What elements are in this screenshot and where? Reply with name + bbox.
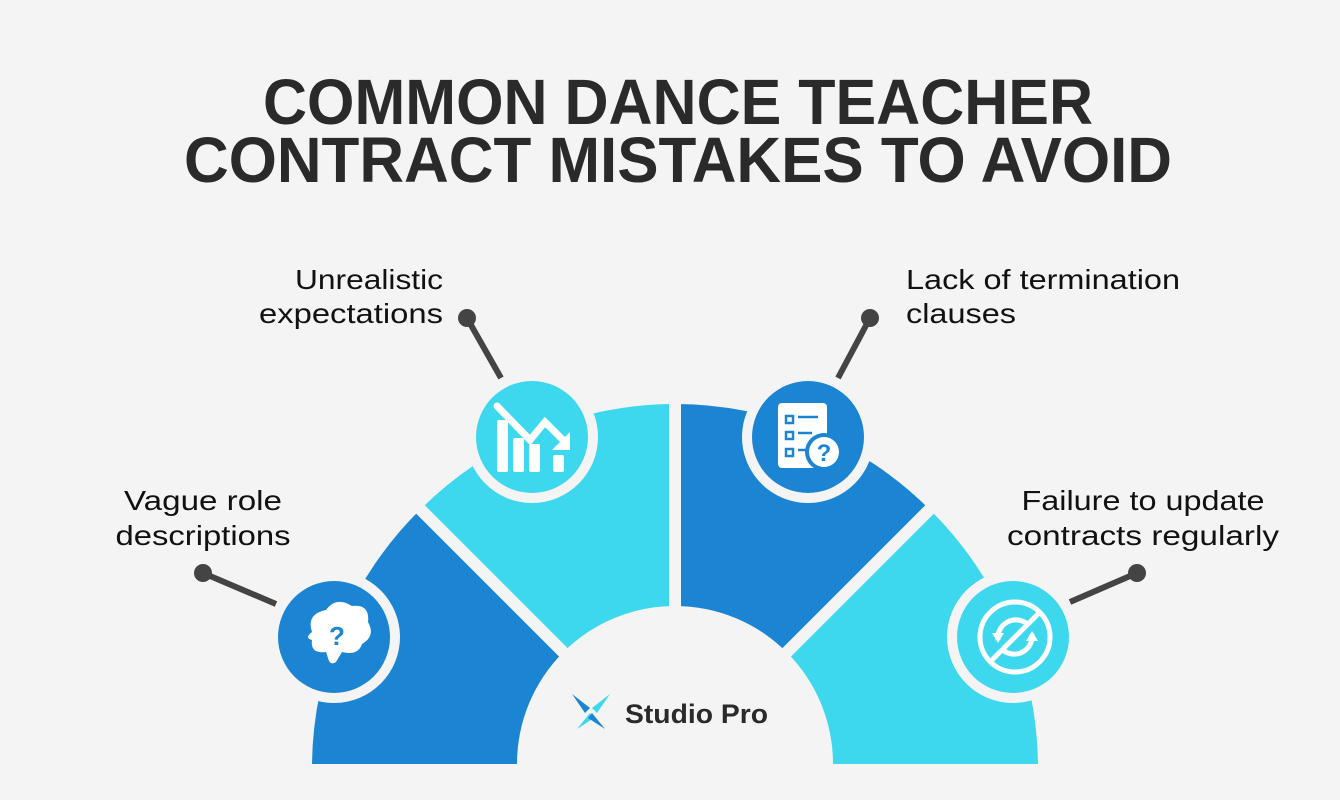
label: failure to update — [1007, 485, 1279, 551]
label: vague role descriptions: descriptions — [116, 520, 290, 551]
segment: unrealistic expectations — [420, 404, 675, 652]
icon: no update — [947, 571, 1079, 703]
logo: Studio Pro — [625, 699, 768, 729]
icon: checklist question: ? — [817, 440, 831, 467]
title: COMMON DANCE TEACHER — [263, 66, 1093, 138]
label: vague role descriptions: Vague role — [124, 485, 282, 516]
label: failure to update: contracts regularly — [1007, 520, 1279, 551]
label: lack of termination clauses — [906, 264, 1180, 329]
icon: checklist question — [742, 371, 874, 503]
label: failure to update: Failure to update — [1022, 485, 1264, 516]
title: CONTRACT MISTAKES TO AVOID — [184, 124, 1172, 196]
icon: brain question: ? — [329, 621, 345, 651]
label: unrealistic expectations: expectations — [259, 298, 443, 329]
label: unrealistic expectations — [259, 264, 443, 329]
label: vague role descriptions — [116, 485, 290, 551]
connector lines — [194, 309, 1146, 604]
semicircle chart — [312, 395, 1038, 764]
label: unrealistic expectations: Unrealistic — [295, 264, 443, 295]
segment: vague role descriptions — [312, 509, 563, 764]
logo — [572, 694, 768, 729]
label: lack of termination clauses: clauses — [906, 298, 1016, 329]
segment: lack of termination clauses — [675, 404, 930, 652]
title — [184, 66, 1172, 196]
segment: failure to update — [787, 509, 1038, 764]
label: lack of termination clauses: Lack of termination — [906, 264, 1180, 295]
icon: declining chart — [466, 371, 598, 503]
icon: brain question — [268, 571, 400, 703]
